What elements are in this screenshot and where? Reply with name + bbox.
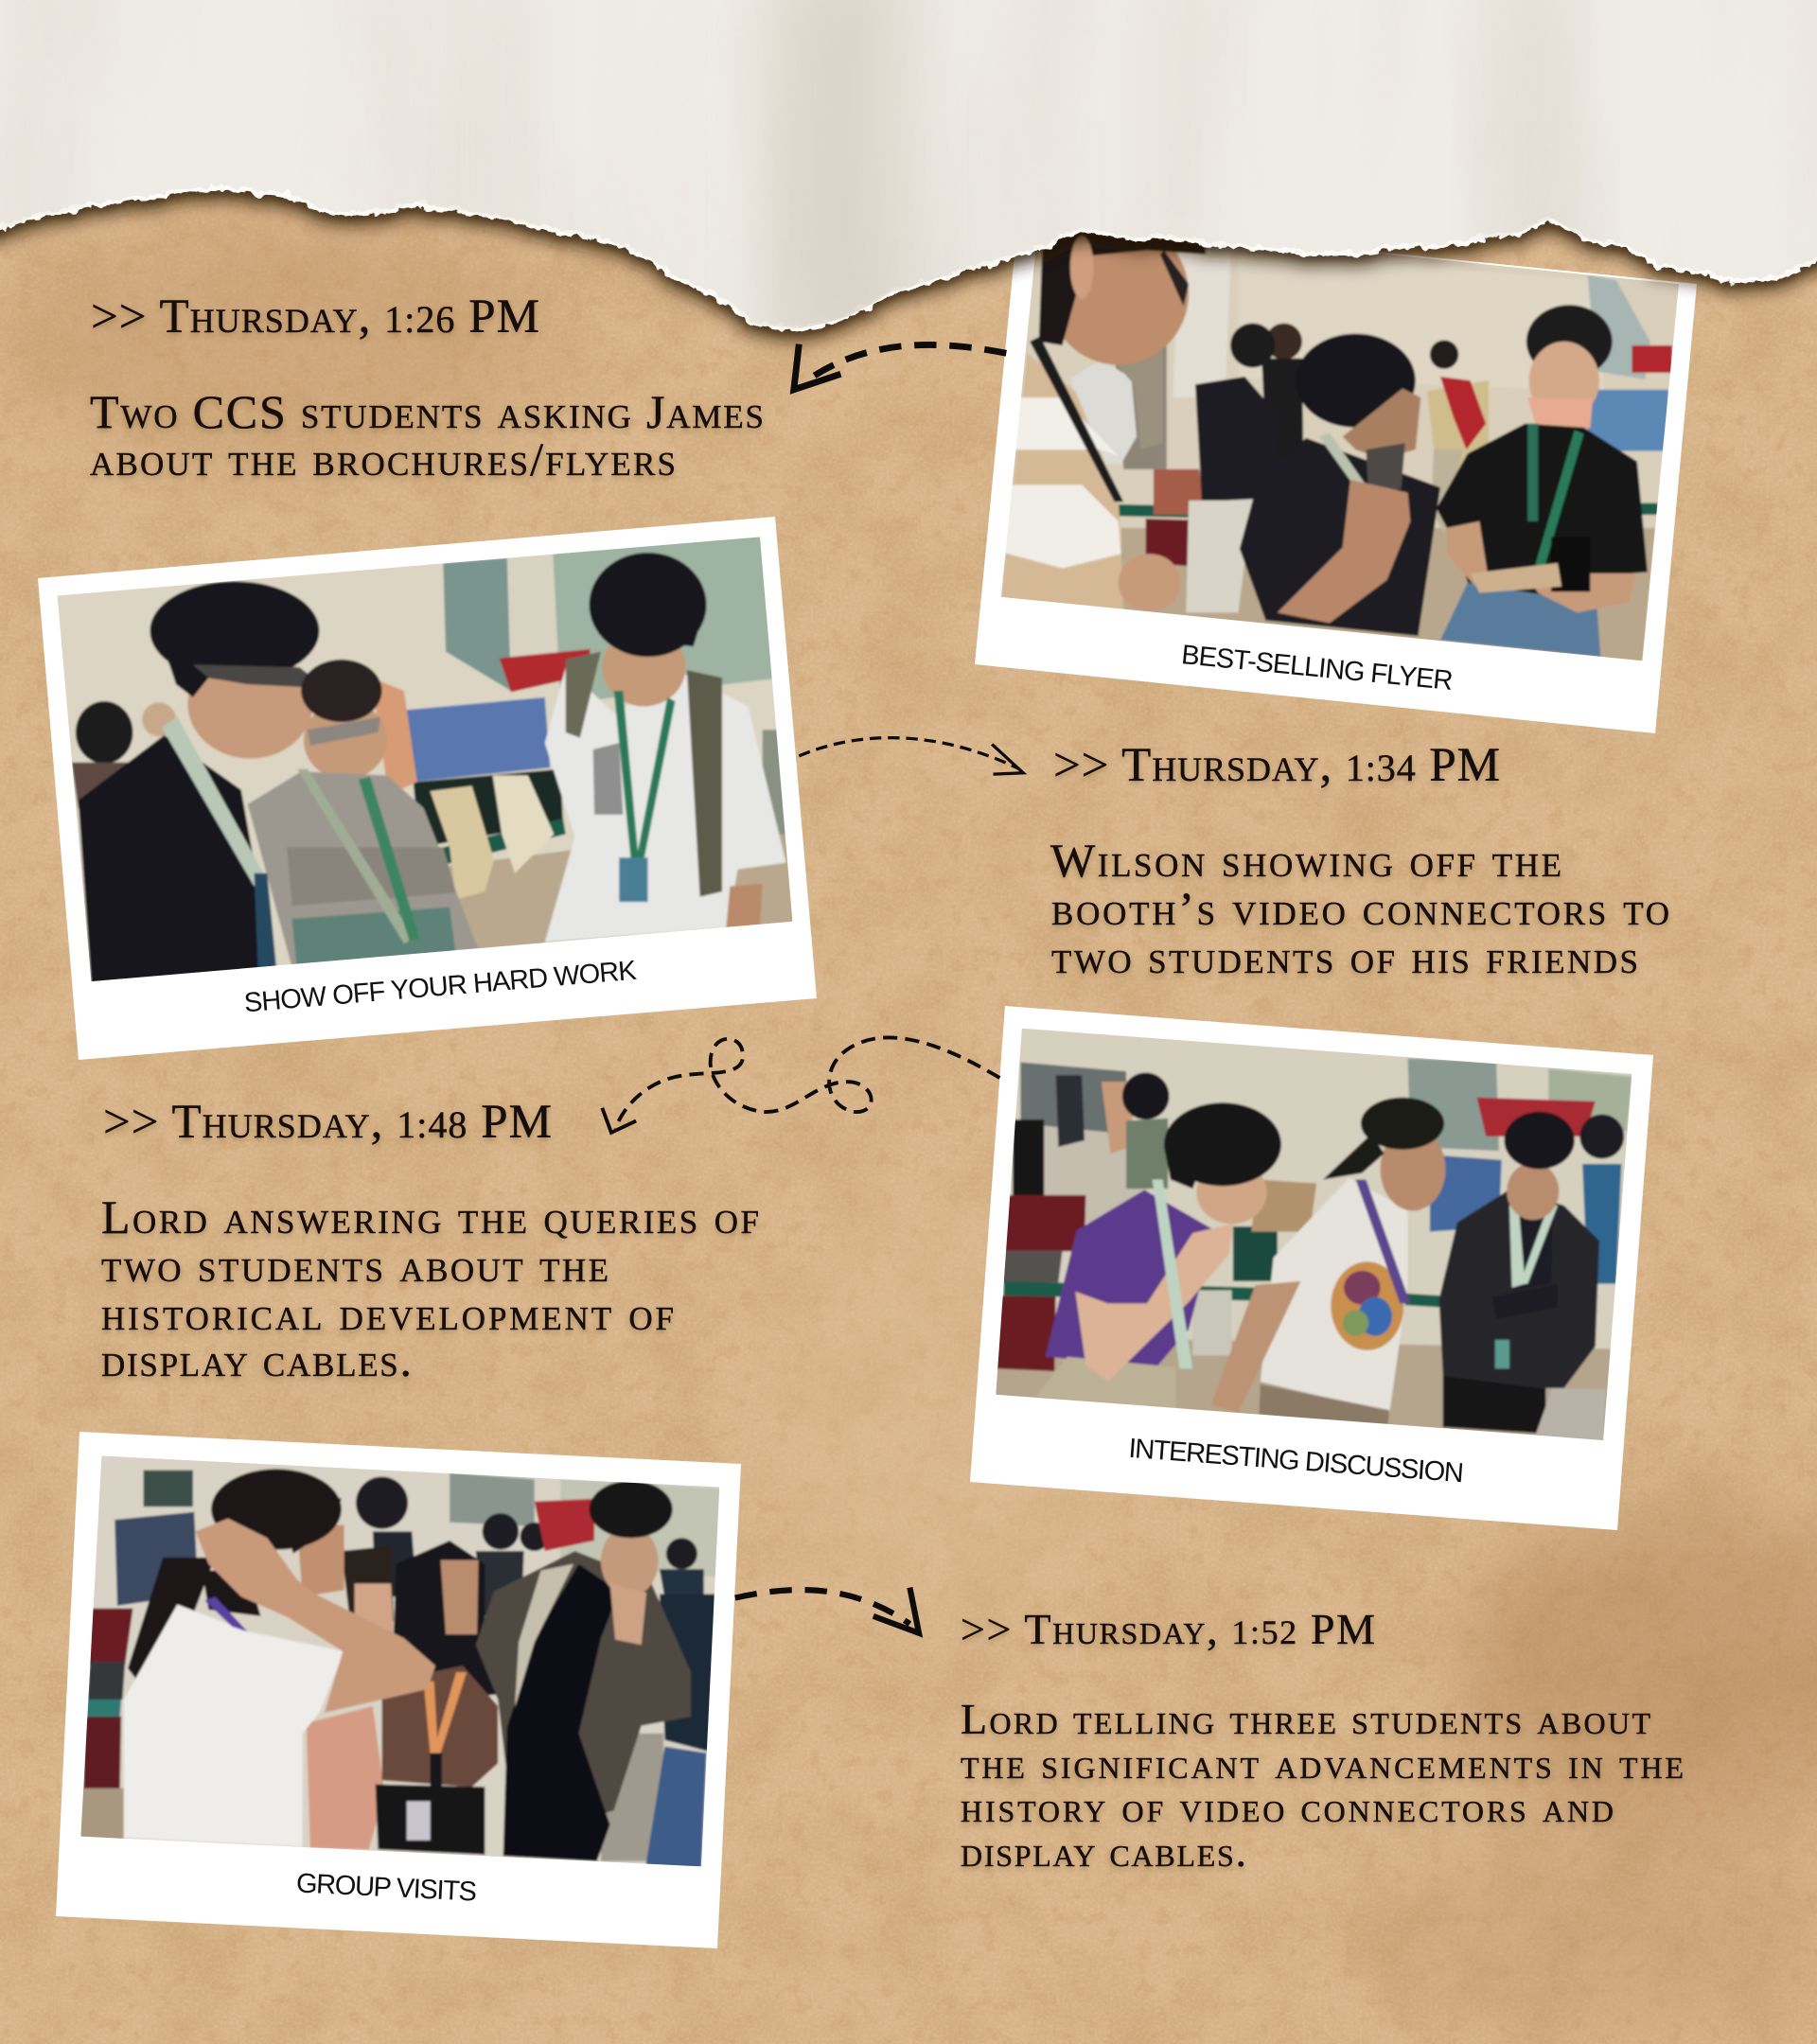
timestamp and text 4: history of video connectors and — [961, 1783, 1614, 1831]
timestamp and text 4: >> Thursday, 1:52 PM — [961, 1605, 1375, 1653]
photo: three students at booth — [39, 528, 808, 991]
timestamp and text 1: about the brochures/flyers — [90, 432, 676, 485]
timestamp and text 2: >> Thursday, 1:34 PM — [1053, 739, 1500, 792]
timestamp and text 3: display cables. — [101, 1333, 412, 1386]
caption: INTERESTING DISCUSSION — [1127, 1434, 1465, 1489]
timestamp and text 3: historical development of — [101, 1287, 674, 1340]
timestamp and text 1: >> Thursday, 1:26 PM — [91, 291, 539, 344]
torn paper header — [0, 0, 1817, 360]
arrow: from photo 4 to text 4 — [735, 1588, 919, 1633]
arrow: looping from photo 3 to text 3 — [602, 1037, 999, 1133]
timestamp and text 3: two students about the — [101, 1239, 609, 1292]
timestamp and text 4 — [961, 1605, 1684, 1876]
polaroid: best-selling flyer — [975, 208, 1697, 733]
timestamp and text 4: the significant advancements in the — [961, 1739, 1684, 1788]
timestamp and text 4: display cables. — [961, 1827, 1246, 1876]
polaroid: show off your hard work — [38, 517, 817, 1060]
polaroid: interesting discussion — [970, 1006, 1653, 1530]
caption: SHOW OFF YOUR HARD WORK — [243, 956, 639, 1018]
photo: discussion at booth — [984, 1016, 1642, 1447]
arrow: from photo 2 to text 2 — [799, 738, 1023, 774]
caption: BEST-SELLING FLYER — [1180, 640, 1455, 696]
timestamp and text 4: Lord telling three students about — [961, 1695, 1650, 1743]
timestamp and text 2: booth’s video connectors to — [1051, 882, 1669, 935]
timestamp and text 1 — [90, 291, 764, 485]
arrow: from flyer photo to text 1 — [794, 344, 1006, 390]
timestamp and text 3: >> Thursday, 1:48 PM — [103, 1096, 552, 1149]
timestamp and text 2 — [1050, 739, 1669, 983]
timestamp and text 1: Two CCS students asking James — [90, 385, 764, 438]
polaroid: group visits — [56, 1432, 741, 1948]
timestamp and text 2: Wilson showing off the — [1050, 834, 1561, 887]
photo: group of visitors — [72, 1447, 730, 1877]
timestamp and text 3 — [101, 1096, 759, 1386]
timestamp and text 2: two students of his friends — [1051, 930, 1638, 983]
timestamp and text 3: Lord answering the queries of — [101, 1190, 759, 1243]
caption: GROUP VISITS — [295, 1868, 478, 1908]
photo: students with flyer — [1001, 232, 1679, 661]
